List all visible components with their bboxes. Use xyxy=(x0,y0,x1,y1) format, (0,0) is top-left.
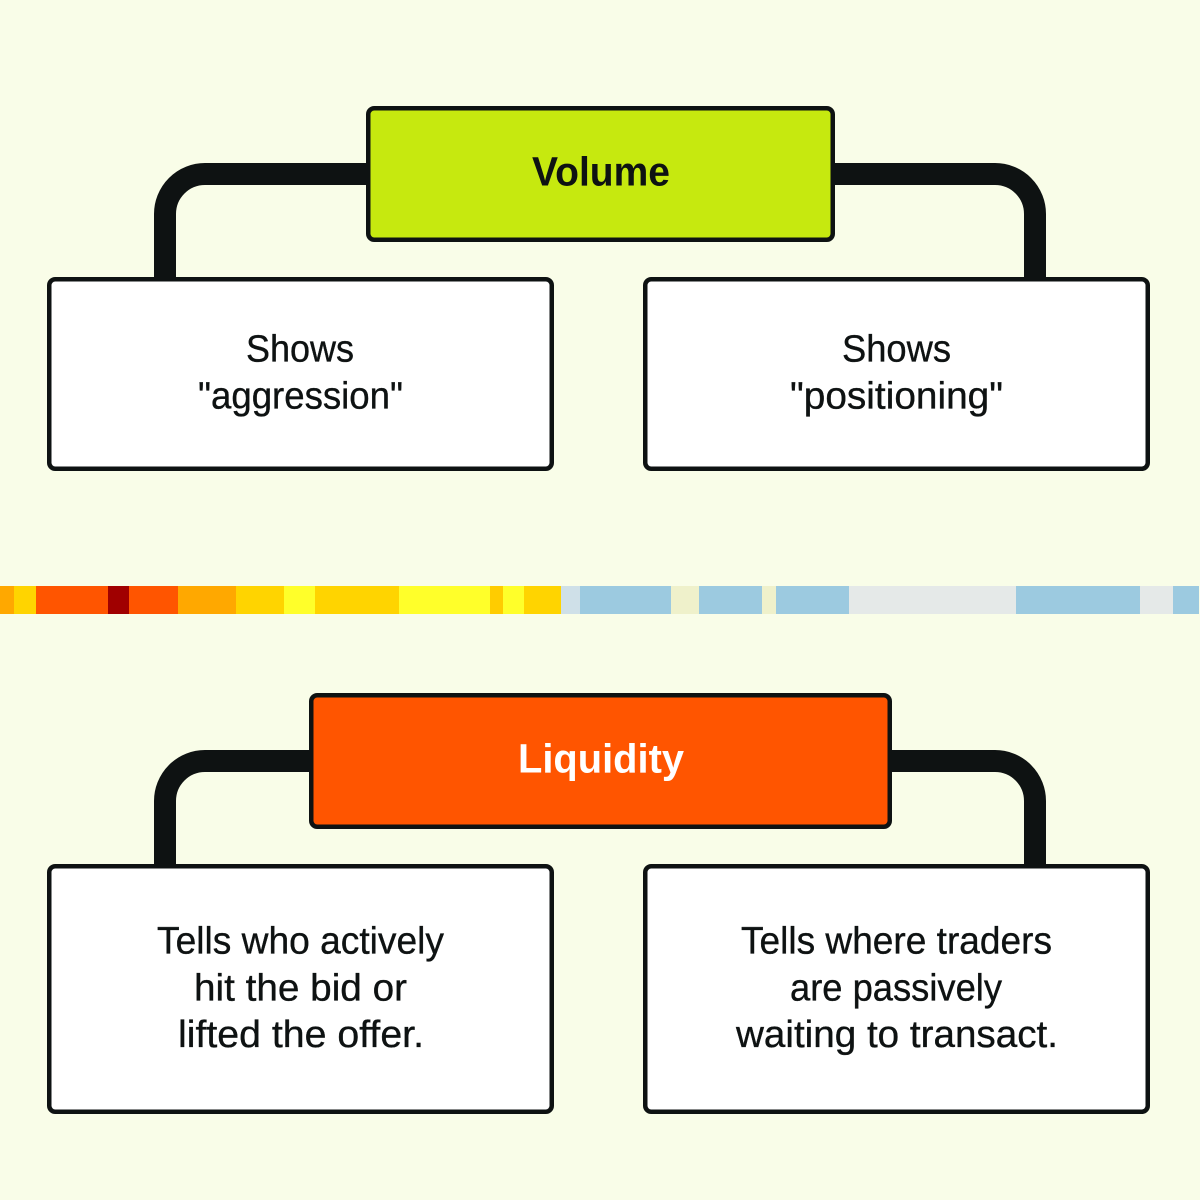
heading box: Volume: Volume xyxy=(532,148,670,194)
card: shows positioning: Shows xyxy=(842,328,951,370)
card: tells where traders: waiting to transact. xyxy=(735,1014,1058,1056)
card: tells who actively: lifted the offer. xyxy=(178,1014,424,1056)
connector: volume to aggression xyxy=(165,174,372,285)
card: tells where traders xyxy=(645,866,1148,1112)
card: shows positioning: "positioning" xyxy=(790,376,1003,418)
card: shows aggression: Shows xyxy=(246,328,354,370)
card: tells where traders: are passively xyxy=(790,968,1002,1010)
card: tells who actively: hit the bid or xyxy=(194,968,407,1010)
card: tells who actively xyxy=(49,866,552,1112)
card: tells where traders: Tells where traders xyxy=(741,920,1052,962)
card: shows aggression xyxy=(49,279,552,469)
heading box: Volume xyxy=(368,108,833,240)
connector: liquidity to waiting xyxy=(885,761,1035,872)
card: shows positioning xyxy=(645,279,1148,469)
card: shows aggression: "aggression" xyxy=(198,376,403,418)
heading box: Liquidity: Liquidity xyxy=(518,736,684,782)
card: tells who actively: Tells who actively xyxy=(157,920,444,962)
heat strip xyxy=(0,586,1199,614)
heading box: Liquidity xyxy=(311,695,890,827)
connector: liquidity to who hit xyxy=(165,761,315,872)
connector: volume to positioning xyxy=(828,174,1035,285)
panel: liquidity diagram xyxy=(49,695,1148,1112)
panel: volume diagram xyxy=(49,108,1148,469)
